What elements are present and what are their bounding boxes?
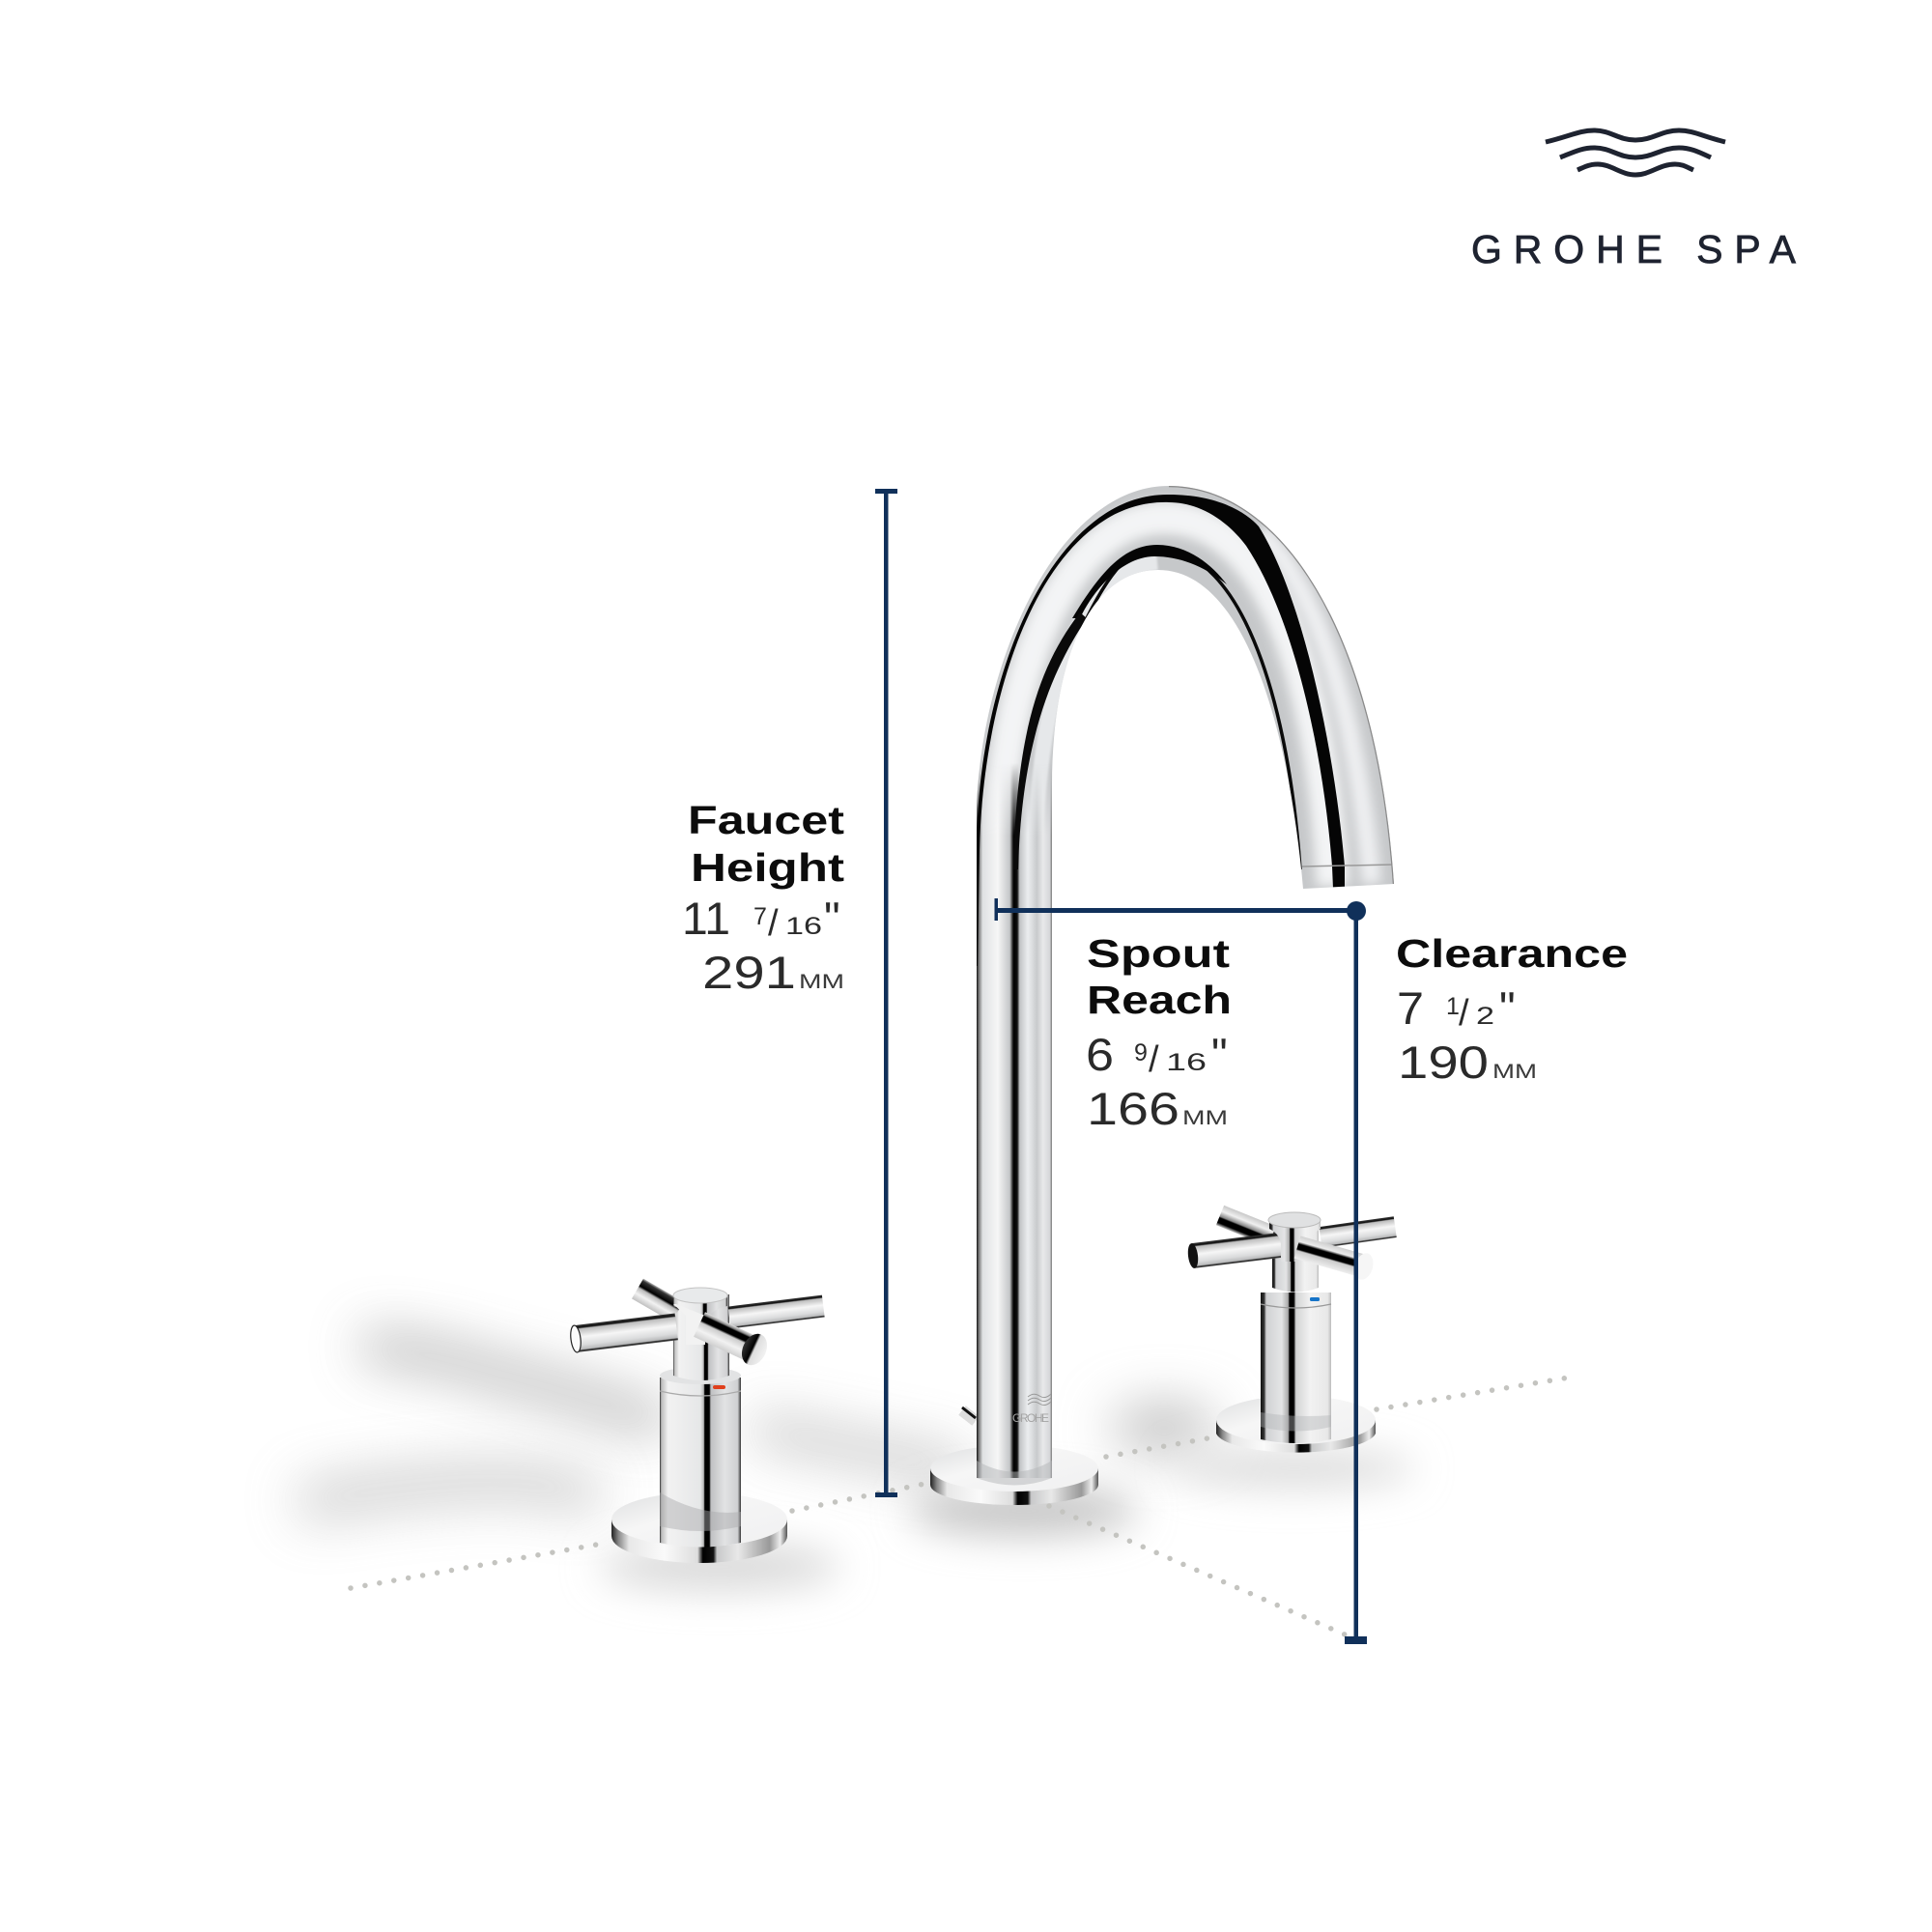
main faucet xyxy=(930,478,1410,1505)
handle cap xyxy=(673,1288,727,1345)
red hot marker xyxy=(713,1385,725,1389)
label: spout reach: " xyxy=(1211,1029,1228,1080)
upper stem xyxy=(673,1294,729,1380)
back and side cross bars xyxy=(1186,1206,1397,1269)
label: clearance: 1 xyxy=(1446,993,1460,1020)
label: clearance: 2 xyxy=(1476,1003,1494,1030)
label: faucet height: 11 xyxy=(682,893,730,944)
label: faucet height: 291 xyxy=(702,947,796,998)
label: spout reach: 166 xyxy=(1087,1083,1179,1134)
label: clearance: 7 xyxy=(1397,982,1424,1034)
label: spout reach: 6 xyxy=(1086,1029,1114,1080)
label: faucet height: 7 xyxy=(753,903,767,930)
post bottom collar xyxy=(977,1461,1052,1486)
back and side cross bars xyxy=(569,1279,825,1352)
label: faucet height: MM xyxy=(799,971,844,993)
front cross bar xyxy=(694,1312,772,1369)
label: faucet height: Height xyxy=(691,845,844,890)
label: clearance: " xyxy=(1499,982,1516,1034)
left handle xyxy=(569,1279,825,1563)
base disc xyxy=(930,1445,1098,1505)
handle body xyxy=(660,1367,741,1548)
base disc xyxy=(611,1492,787,1563)
base disc xyxy=(1216,1396,1376,1453)
front cross bar xyxy=(1294,1236,1377,1282)
label: faucet height: 16 xyxy=(785,913,822,940)
right handle xyxy=(1186,1206,1397,1453)
label: faucet height: Faucet xyxy=(688,798,844,842)
label: clearance xyxy=(1396,931,1628,1088)
upper stem xyxy=(1272,1219,1319,1293)
label: faucet height: / xyxy=(768,903,779,944)
label: clearance: / xyxy=(1459,993,1469,1034)
label: spout reach: 16 xyxy=(1166,1049,1207,1076)
engraved GROHE mark: GROHE xyxy=(1012,1411,1049,1425)
label: spout reach: / xyxy=(1149,1039,1159,1080)
pop-up lever xyxy=(962,1407,976,1421)
dimension: clearance line and spout reach line xyxy=(995,898,1367,1644)
label: spout reach: 9 xyxy=(1134,1039,1148,1066)
label: faucet height: " xyxy=(824,893,840,944)
spout tube xyxy=(966,478,1410,1478)
icon: small waves on post xyxy=(1028,1394,1051,1406)
dimension: faucet height bar xyxy=(875,489,897,1497)
floor shadows xyxy=(299,1345,1415,1590)
label: clearance: MM xyxy=(1492,1061,1537,1083)
label: spout reach: MM xyxy=(1182,1107,1228,1129)
handle body xyxy=(1261,1293,1331,1443)
icon: Grohe Spa waves logo xyxy=(1546,130,1725,175)
handle cap xyxy=(1268,1212,1321,1262)
label: spout reach: Reach xyxy=(1087,978,1232,1022)
blue cold marker xyxy=(1310,1297,1320,1301)
label: spout reach: Spout xyxy=(1087,931,1230,976)
label: spout reach xyxy=(1086,931,1232,1134)
label: clearance: Clearance xyxy=(1396,931,1628,976)
dotted floor lines xyxy=(351,1377,1575,1634)
brand name: GROHE SPA xyxy=(1471,227,1797,271)
label: clearance: 190 xyxy=(1398,1037,1489,1088)
label: faucet height xyxy=(682,798,844,998)
